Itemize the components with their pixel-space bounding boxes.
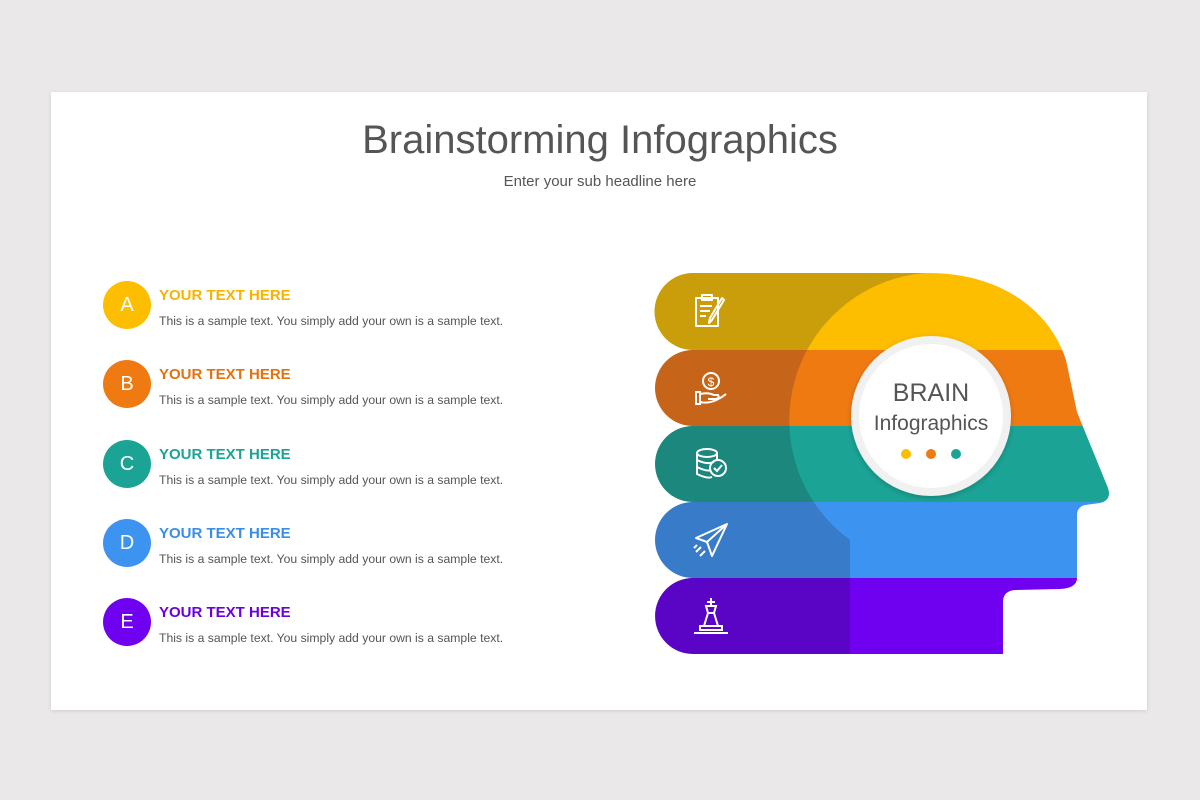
item D: This is a sample text. You simply add your own is a sample text. [159, 552, 503, 566]
item A: YOUR TEXT HERE [159, 287, 291, 304]
item B [103, 360, 503, 408]
head diagram [654, 273, 1109, 654]
item E: YOUR TEXT HERE [159, 604, 291, 621]
icon: paper plane [694, 524, 727, 556]
item A [103, 281, 503, 329]
item B: YOUR TEXT HERE [159, 366, 291, 383]
item B: B [120, 373, 134, 395]
pill tabs [654, 273, 930, 654]
center circle: Infographics [874, 412, 988, 435]
head silhouette bands [780, 260, 1120, 658]
icon: hand coin: $ [708, 375, 715, 389]
item C [103, 440, 503, 488]
item C: C [120, 453, 134, 475]
item D: YOUR TEXT HERE [159, 525, 291, 542]
title: Brainstorming Infographics [362, 118, 838, 162]
icon: database check [697, 449, 726, 478]
item A: This is a sample text. You simply add your own is a sample text. [159, 314, 503, 328]
item E [103, 598, 503, 646]
icon: document pen [696, 295, 724, 326]
center circle: BRAIN [893, 379, 969, 407]
item A: A [120, 294, 134, 316]
item C: This is a sample text. You simply add your own is a sample text. [159, 473, 503, 487]
icon: chess king [694, 598, 728, 633]
icon: hand coin [696, 373, 726, 404]
item E: This is a sample text. You simply add your own is a sample text. [159, 631, 503, 645]
subtitle: Enter your sub headline here [504, 173, 696, 190]
item D [103, 519, 503, 567]
item C: YOUR TEXT HERE [159, 446, 291, 463]
item D: D [120, 532, 134, 554]
item E: E [120, 611, 134, 633]
center circle [851, 336, 1011, 496]
item B: This is a sample text. You simply add your own is a sample text. [159, 393, 503, 407]
